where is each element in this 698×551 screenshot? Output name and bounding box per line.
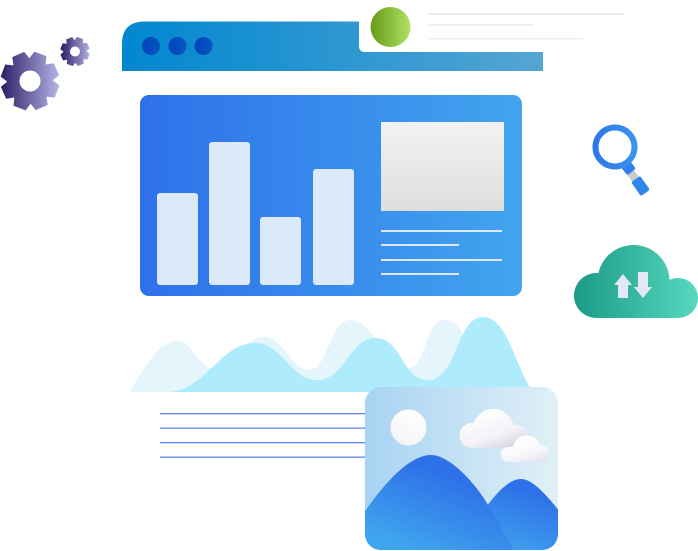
small cloud [501, 436, 549, 462]
icon: magnifying glass [596, 128, 650, 196]
bar chart [157, 142, 354, 285]
profile text lines [429, 13, 624, 40]
text lines [160, 413, 366, 458]
profile avatar circle [370, 7, 410, 47]
mountains [363, 455, 560, 551]
sun [390, 410, 426, 446]
icon: cloud transfer [574, 245, 698, 318]
upload arrow [614, 274, 632, 298]
icon: small gear [60, 36, 91, 67]
image placeholder [381, 122, 504, 211]
download arrow [634, 272, 652, 298]
area chart: front wave [167, 317, 533, 392]
image card [363, 387, 560, 551]
large cloud [459, 409, 530, 448]
panel: dashboard [140, 95, 522, 296]
browser title bar [122, 22, 543, 71]
panel text lines [381, 230, 502, 275]
icon: large gear [0, 50, 60, 112]
window control dots [142, 37, 212, 55]
area chart: back wave [129, 320, 500, 392]
